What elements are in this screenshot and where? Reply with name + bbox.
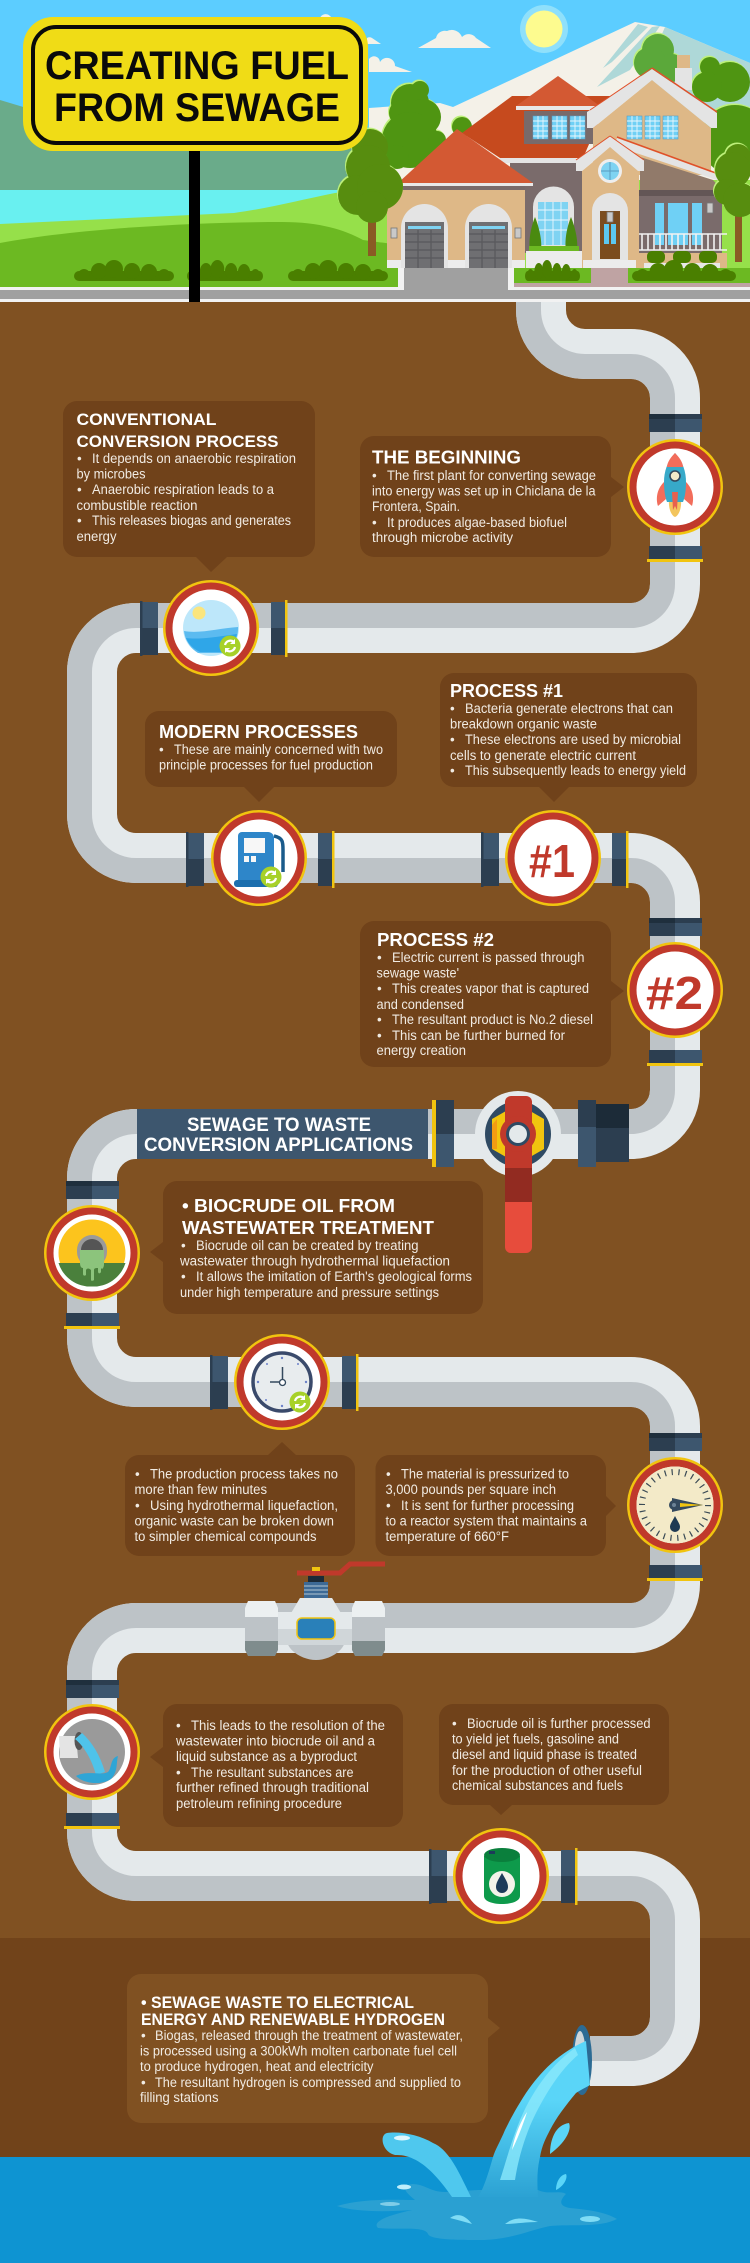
body text: These electrons are used by microbial <box>465 732 681 747</box>
trees in front of house <box>337 128 750 262</box>
body text: • <box>181 1238 186 1253</box>
title: FROM SEWAGE <box>54 86 340 130</box>
body text: • <box>181 1269 186 1284</box>
callout: process 2 <box>360 921 624 1067</box>
mountain <box>369 22 750 200</box>
body text: • <box>141 2028 146 2043</box>
icon: clock <box>234 1334 330 1430</box>
body text: energy <box>76 529 117 544</box>
body text: This leads to the resolution of the <box>191 1718 385 1733</box>
icon: pipe pouring water <box>44 1704 140 1800</box>
body text: • <box>135 1498 140 1513</box>
body text: • <box>77 451 82 466</box>
hill: left <box>0 100 380 195</box>
icon: number 2 <box>627 942 723 1038</box>
body text: • <box>377 1012 382 1027</box>
body text: • <box>386 1498 391 1513</box>
body text: cells to generate electric current <box>450 748 636 763</box>
body text: wastewater through hydrothermal liquefaction <box>179 1254 450 1268</box>
body text: The first plant for converting sewage <box>387 468 596 483</box>
callout: the beginning <box>360 436 624 557</box>
body text: These are mainly concerned with two <box>174 742 383 757</box>
heading: CONVERSION PROCESS <box>76 433 278 451</box>
body text: • <box>176 1718 181 1733</box>
bushes <box>74 260 736 281</box>
body text: • <box>377 950 382 965</box>
heading: • SEWAGE WASTE TO ELECTRICAL <box>141 1994 414 2012</box>
body text: breakdown organic waste <box>450 716 597 732</box>
banner: sewage to waste conversion applications <box>137 1109 428 1159</box>
heading: WASTEWATER TREATMENT <box>182 1218 434 1238</box>
body text: diesel and liquid phase is treated <box>452 1747 637 1762</box>
body text: is processed using a 300kWh molten carbonate fuel cell <box>140 2044 457 2058</box>
body text: The resultant product is No.2 diesel <box>392 1012 593 1027</box>
lake <box>0 190 380 226</box>
body text <box>386 1466 588 1544</box>
heading: PROCESS #2 <box>377 930 494 950</box>
body text: Electric current is passed through <box>392 950 584 965</box>
callout: further processing <box>439 1704 669 1815</box>
body text: filling stations <box>140 2090 219 2105</box>
body text <box>179 1238 472 1300</box>
heading <box>182 1196 434 1238</box>
grass <box>0 180 750 290</box>
body text: This can be further burned for <box>392 1028 566 1043</box>
heading <box>76 411 278 451</box>
icon: number 2: #2 <box>646 967 703 1019</box>
body text <box>140 2028 463 2105</box>
body text: • <box>450 701 455 716</box>
body text: Anaerobic respiration leads to a <box>92 482 275 497</box>
body text: Using hydrothermal liquefaction, <box>150 1498 338 1513</box>
pipe flanges <box>64 414 703 1905</box>
body text <box>175 1718 385 1811</box>
body text: into energy was set up in Chiclana de la <box>372 484 596 498</box>
callout: conventional conversion process <box>63 401 315 572</box>
body text: by microbes <box>76 466 146 482</box>
body text: for the production of other useful <box>452 1763 642 1778</box>
body text: through microbe activity <box>372 530 513 545</box>
body text: • <box>372 468 377 483</box>
body text: This releases biogas and generates <box>92 513 291 528</box>
pipeline <box>80 302 675 2061</box>
body text: to yield jet fuels, gasoline and <box>452 1732 619 1746</box>
house <box>387 55 727 268</box>
body text: It is sent for further processing <box>401 1498 574 1513</box>
title: CREATING FUEL <box>45 44 349 88</box>
body text: wastewater into biocrude oil and a <box>175 1734 376 1748</box>
icon: fuel pump <box>211 810 307 906</box>
body text <box>376 950 593 1058</box>
sign post <box>189 150 200 302</box>
body text: and condensed <box>376 997 464 1012</box>
icon: pressure gauge <box>627 1457 723 1553</box>
icon: beach <box>163 580 259 676</box>
body text: energy creation <box>376 1043 466 1058</box>
icon: sewer outflow <box>44 1205 140 1301</box>
body text: • <box>372 515 377 530</box>
body text: • <box>135 1466 140 1482</box>
icon: oil barrel <box>453 1828 549 1924</box>
body text: • <box>450 732 455 747</box>
callout: modern processes <box>145 711 397 802</box>
valve: red lever <box>432 1091 629 1253</box>
trees behind house <box>381 32 750 175</box>
body text: • <box>377 1028 382 1043</box>
title sign <box>23 17 368 151</box>
body text: It depends on anaerobic respiration <box>92 451 296 466</box>
body text: Biocrude oil can be created by treating <box>196 1238 418 1253</box>
body text: • <box>452 1716 457 1731</box>
body text: It allows the imitation of Earth's geological forms <box>196 1269 472 1284</box>
icon: number 1 <box>505 810 601 906</box>
body text: The material is pressurized to <box>401 1466 569 1482</box>
body text: combustible reaction <box>76 498 198 513</box>
body text: Frontera, Spain. <box>372 499 460 514</box>
body text: more than few minutes <box>134 1482 267 1497</box>
body text: It produces algae-based biofuel <box>387 515 567 530</box>
body text: chemical substances and fuels <box>452 1778 623 1793</box>
body text: The resultant hydrogen is compressed and supplied to <box>155 2075 461 2090</box>
heading: PROCESS #1 <box>450 681 563 701</box>
body text <box>372 468 596 545</box>
heading <box>141 1994 445 2029</box>
body text: The production process takes no <box>150 1466 338 1482</box>
body text: • <box>176 1765 181 1780</box>
heading: THE BEGINNING <box>372 448 521 468</box>
body text: to a reactor system that maintains a <box>386 1514 588 1528</box>
body text <box>134 1466 338 1544</box>
valve: inline with blue window <box>245 1564 385 1660</box>
pipe outlet with water stream and splash <box>337 2025 617 2240</box>
body text: petroleum refining procedure <box>176 1796 342 1811</box>
body text <box>159 742 383 772</box>
body text: 3,000 pounds per square inch <box>386 1482 556 1497</box>
body text: sewage waste' <box>376 966 459 980</box>
body text: organic waste can be broken down <box>134 1514 334 1528</box>
icon: number 1: #1 <box>529 835 575 887</box>
body text: This creates vapor that is captured <box>392 981 589 996</box>
body text: temperature of 660°F <box>386 1529 509 1544</box>
body text: Biocrude oil is further processed <box>467 1716 650 1731</box>
heading: ENERGY AND RENEWABLE HYDROGEN <box>141 2011 445 2029</box>
callout: pressurized material <box>376 1455 616 1556</box>
body text: The resultant substances are <box>191 1765 354 1780</box>
body text: liquid substance as a byproduct <box>176 1749 357 1764</box>
body text: to simpler chemical compounds <box>134 1529 317 1544</box>
icon: sun <box>520 5 568 53</box>
scene: sky and landscape <box>0 0 750 302</box>
body text: • <box>386 1466 391 1482</box>
body text <box>76 451 296 544</box>
road and driveway <box>0 268 750 302</box>
callout: process 1 <box>440 673 697 802</box>
callout: sewage waste to electrical energy <box>127 1974 500 2123</box>
body text: to produce hydrogen, heat and electricity <box>140 2059 374 2074</box>
body text: further refined through traditional <box>176 1780 369 1795</box>
callout: resolution of wastewater <box>150 1704 403 1827</box>
banner: sewage to waste conversion applications: SEWAGE TO WASTE <box>187 1114 371 1136</box>
heading: MODERN PROCESSES <box>159 722 358 742</box>
title <box>45 44 349 130</box>
icon: rocket <box>627 439 723 535</box>
heading: CONVENTIONAL <box>76 411 216 429</box>
body text: • <box>377 981 382 996</box>
callout: biocrude oil from wastewater treatment <box>150 1181 483 1314</box>
body text: Biogas, released through the treatment of wastewater, <box>155 2028 463 2043</box>
body text: • <box>159 742 164 757</box>
banner: sewage to waste conversion applications: CONVERSION APPLICATIONS <box>144 1134 413 1156</box>
body text <box>452 1716 650 1793</box>
body text: under high temperature and pressure settings <box>180 1285 439 1300</box>
icon: clouds <box>320 14 491 72</box>
body text: • <box>141 2075 146 2090</box>
callout: production process <box>125 1442 355 1556</box>
body text: • <box>77 513 82 528</box>
heading: • BIOCRUDE OIL FROM <box>182 1196 395 1216</box>
body text: • <box>450 763 455 778</box>
body text: • <box>77 482 82 497</box>
body text: principle processes for fuel production <box>159 758 373 772</box>
body text: This subsequently leads to energy yield <box>465 763 686 778</box>
body text: Bacteria generate electrons that can <box>465 701 673 716</box>
body text <box>450 701 686 778</box>
